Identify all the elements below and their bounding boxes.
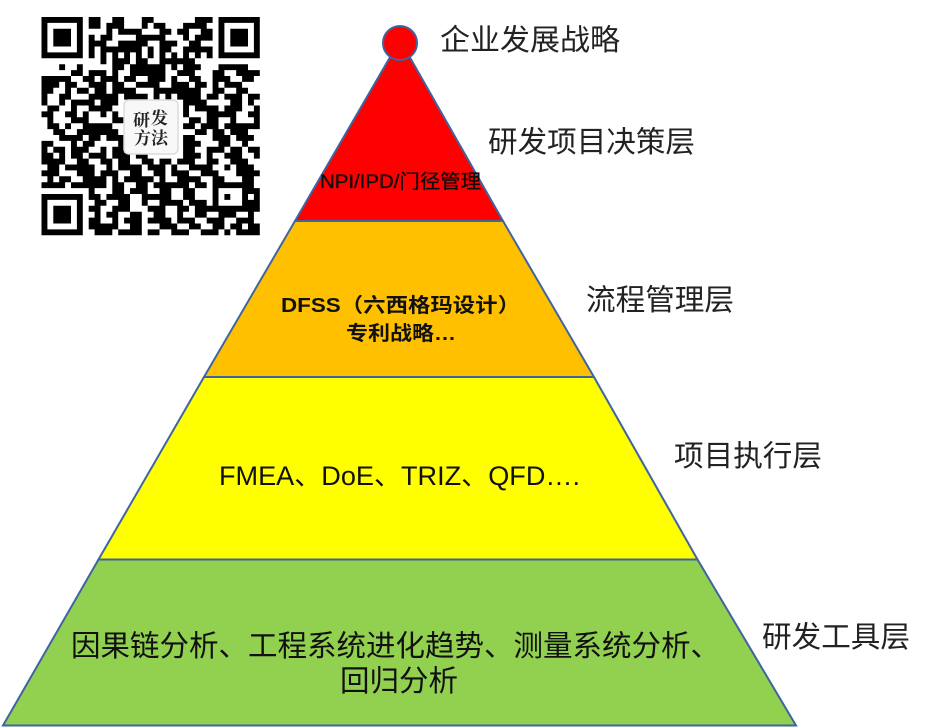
QR code xyxy=(42,17,260,235)
label: tools layer: 研发工具层 xyxy=(762,621,910,654)
QR centre logo: 方 xyxy=(134,129,151,148)
label: execution layer: 项目执行层 xyxy=(674,440,822,473)
text: orange tier: 专利战略… xyxy=(346,321,456,345)
QR centre logo: 发 xyxy=(151,109,168,128)
text: green tier xyxy=(71,630,720,698)
text: orange tier: DFSS（六西格玛设计） xyxy=(281,294,520,317)
apex circle xyxy=(383,26,417,60)
label: decision layer: 研发项目决策层 xyxy=(488,126,695,159)
pyramid tier 2: process (orange) xyxy=(204,221,594,377)
QR finder patterns xyxy=(42,17,260,235)
text: red tier: NPI/IPD/门径管理 xyxy=(320,171,481,193)
text: green tier: 回归分析 xyxy=(340,665,458,698)
label: process layer: 流程管理层 xyxy=(586,284,734,317)
QR centre logo: 法 xyxy=(151,129,170,148)
text: orange tier xyxy=(281,294,520,345)
QR centre logo: 研 xyxy=(133,111,150,130)
text: green tier: 因果链分析、工程系统进化趋势、测量系统分析、 xyxy=(71,630,720,663)
text: yellow tier: FMEA、DoE、TRIZ、QFD…. xyxy=(219,461,580,491)
pyramid tier 1: decision (red) xyxy=(295,40,503,221)
QR data modules xyxy=(42,20,260,232)
pyramid tier 4: tools (green) xyxy=(3,560,796,726)
label: corporate strategy: 企业发展战略 xyxy=(440,24,620,57)
QR centre logo xyxy=(124,100,178,154)
pyramid tier 3: execution (yellow) xyxy=(98,377,698,560)
